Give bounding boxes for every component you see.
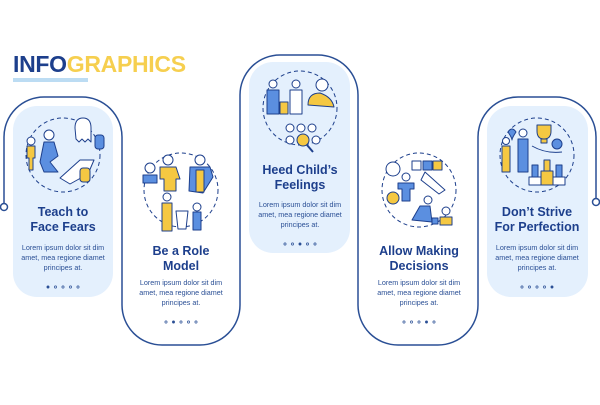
text: card 2 body: principes at. — [162, 298, 200, 307]
text: Decisions — [389, 259, 449, 273]
text: card 4 body — [377, 278, 461, 307]
dots: card 5 — [521, 286, 553, 288]
text: For Perfection — [495, 220, 579, 234]
text: card 1 body: amet, mea regione diamet — [21, 253, 105, 262]
icon: heed feelings — [263, 71, 337, 152]
text: card 2 body — [139, 278, 223, 307]
heading: card 1: Teach to — [38, 205, 89, 219]
text: card 5 body: amet, mea regione diamet — [495, 253, 579, 262]
heading: card 4: Allow Making — [379, 244, 459, 258]
title: INFOGRAPHICS — [13, 51, 186, 77]
heading: card 2: Be a Role — [153, 244, 210, 258]
text: card 5 body: principes at. — [518, 263, 556, 272]
text: card 1 body — [21, 243, 105, 272]
text: card 3 body — [258, 200, 342, 229]
text: card 2 body: Lorem ipsum dolor sit dim — [140, 278, 222, 287]
icon: perfection — [500, 118, 574, 192]
serpentine outline — [0, 55, 600, 345]
dots: card 2 — [165, 321, 197, 323]
text: card 3 body: amet, mea regione diamet — [258, 210, 342, 219]
text: card 4 body: Lorem ipsum dolor sit dim — [378, 278, 460, 287]
text: card 3 body: principes at. — [281, 220, 319, 229]
dots: card 1 — [47, 286, 79, 288]
icon: face fears — [26, 118, 104, 192]
panel: card 1 background — [13, 106, 113, 297]
text: Face Fears — [30, 220, 96, 234]
text: card 1 body: Lorem ipsum dolor sit dim — [22, 243, 104, 252]
icon: role model — [143, 153, 218, 231]
dots: card 4 — [403, 321, 435, 323]
text: card 5 body — [495, 243, 579, 272]
heading: card 3: Heed Child’s — [262, 163, 338, 177]
text: card 4 body: principes at. — [400, 298, 438, 307]
icon: allow decisions — [382, 153, 456, 227]
text: card 3 body: Lorem ipsum dolor sit dim — [259, 200, 341, 209]
text: card 2 body: amet, mea regione diamet — [139, 288, 223, 297]
panel: card 3 background — [249, 62, 350, 253]
text: card 1 body: principes at. — [44, 263, 82, 272]
text: card 4 body: amet, mea regione diamet — [377, 288, 461, 297]
dots: card 3 — [284, 243, 316, 245]
heading: card 5: Don’t Strive — [502, 205, 572, 219]
panel: card 5 background — [487, 106, 588, 297]
text: Feelings — [275, 178, 325, 192]
text: card 5 body: Lorem ipsum dolor sit dim — [496, 243, 578, 252]
text: Model — [163, 259, 199, 273]
